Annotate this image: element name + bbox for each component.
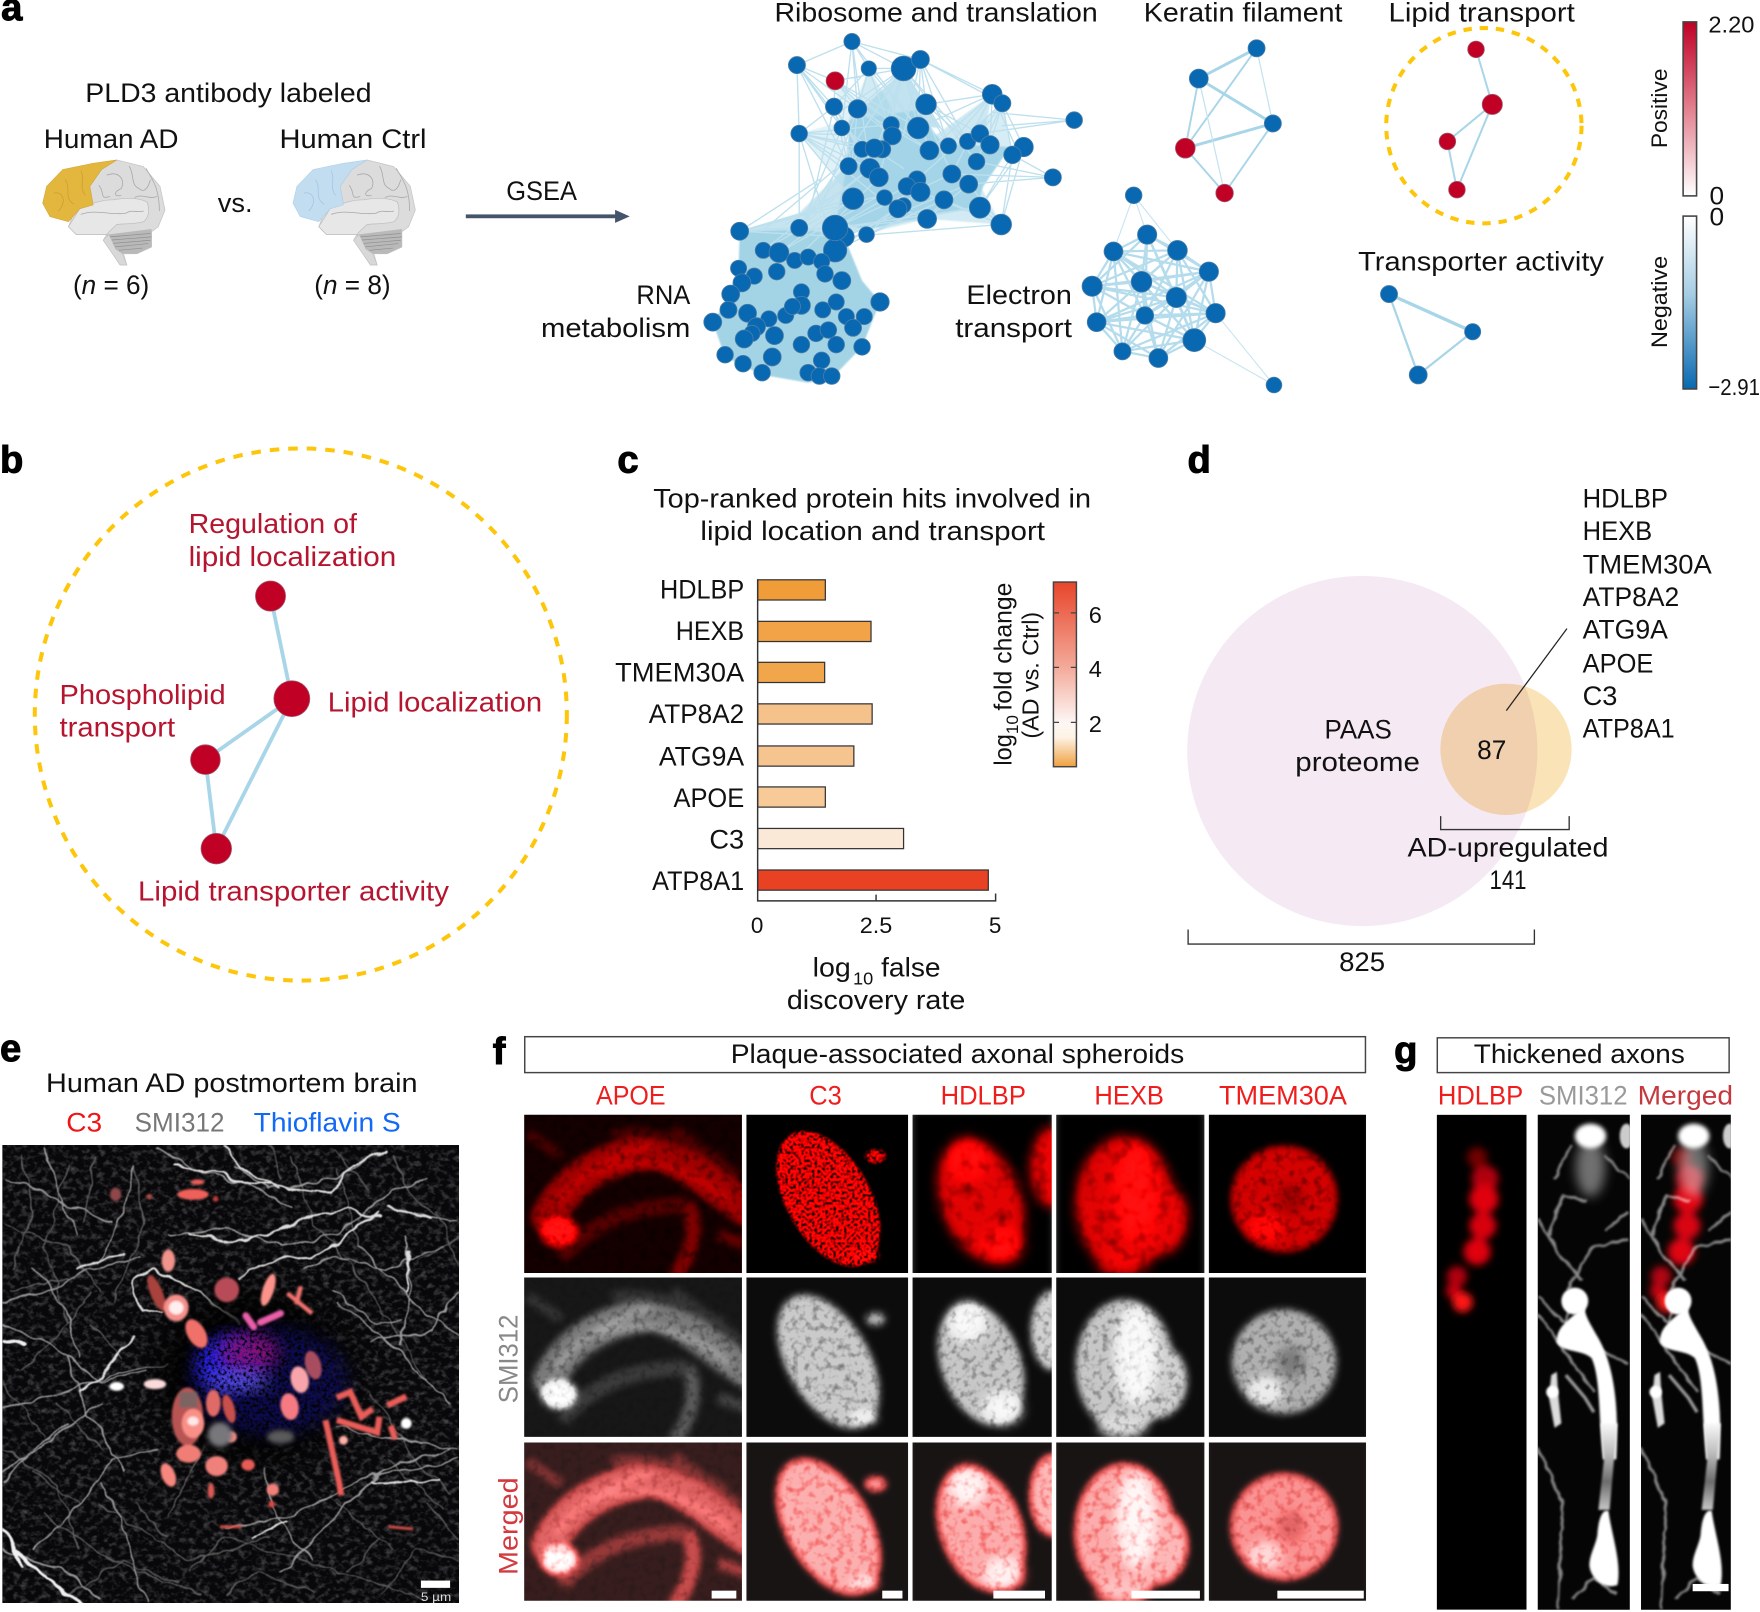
- gene list: ATP8A1: [1583, 714, 1675, 744]
- gene list: TMEM30A: [1583, 550, 1712, 580]
- category labels: C3: [709, 825, 744, 855]
- circle: PAAS proteome: [1187, 576, 1537, 926]
- label: lipid localization: Lipid localization: [328, 687, 542, 718]
- legend: positive colour bar: Positive: [1647, 68, 1672, 148]
- label: Human AD: Human AD: [44, 124, 178, 154]
- category labels: ATP8A2: [649, 699, 744, 729]
- edges: ribosome and RNA: [713, 42, 1074, 383]
- x axis title: 10: [853, 968, 873, 988]
- label: AD-upregulated 141: [1408, 833, 1608, 895]
- x axis title: log: [813, 953, 851, 983]
- plaque halo: [157, 1291, 348, 1459]
- gene list: [1583, 483, 1712, 744]
- gene list: HDLBP: [1583, 483, 1668, 513]
- column labels: panel g: Merged: [1638, 1081, 1733, 1111]
- legend: negative colour bar: [1647, 205, 1760, 400]
- micrographs: row 1 antibody channel: [516, 1106, 1372, 1285]
- legend: fold change colour bar: [990, 582, 1102, 767]
- label: n = 8: (n = 8): [314, 270, 391, 300]
- node: phospholipid transport: [191, 745, 220, 774]
- category labels: APOE: [673, 783, 744, 813]
- nodes: ribosome and translation: [788, 33, 1082, 242]
- x axis title: false: [881, 953, 941, 983]
- label: Electron transport: [955, 280, 1072, 343]
- category labels: TMEM30A: [615, 657, 744, 687]
- heading: top-ranked protein hits: lipid location and transport: [700, 516, 1046, 546]
- header box: plaque-associated axonal spheroids: [525, 1037, 1365, 1073]
- legend: negative colour bar: Negative: [1647, 256, 1672, 348]
- tick labels: 2.5: [860, 913, 892, 938]
- legend: negative colour bar: 0: [1709, 205, 1724, 232]
- gene list: ATG9A: [1583, 615, 1668, 645]
- legend: stain colours: [66, 1108, 401, 1138]
- panel label e: e: [0, 1027, 21, 1070]
- legend: positive colour bar: [1647, 12, 1754, 210]
- venn diagram: [1187, 483, 1712, 977]
- legend: stain colours: Thioflavin S: [254, 1108, 401, 1138]
- row label: SMI312: SMI312: [493, 1315, 523, 1403]
- column labels: panel g: [1438, 1081, 1733, 1111]
- axes: [758, 579, 996, 901]
- label: Electron transport: transport: [955, 313, 1072, 343]
- leader line: [1506, 629, 1567, 711]
- legend: positive colour bar: 0: [1709, 183, 1724, 210]
- legend: fold change colour bar: 4: [1089, 656, 1102, 682]
- label: lipid transporter activity: Lipid transporter activity: [138, 875, 449, 906]
- label: GSEA: GSEA: [506, 176, 577, 206]
- panel label c: c: [617, 439, 639, 482]
- node: lipid localization: [274, 681, 310, 717]
- x axis title: discovery rate: [787, 985, 965, 1015]
- tick labels: [751, 913, 1001, 938]
- scale bar: 5 µm: [421, 1591, 451, 1604]
- label: regulation of lipid localization: [189, 508, 396, 572]
- nodes: RNA metabolism: [704, 215, 889, 384]
- scale bar: panel g: [1693, 1584, 1729, 1591]
- category labels: ATG9A: [659, 742, 744, 772]
- panel label b: b: [0, 439, 23, 482]
- panel: lipid transport detail: [35, 448, 567, 981]
- legend: fold change colour bar: log: [990, 734, 1017, 766]
- gene list: HEXB: [1583, 516, 1652, 546]
- scale bar: [421, 1581, 451, 1604]
- panel label d: d: [1188, 439, 1211, 482]
- legend: fold change colour bar: 2: [1089, 711, 1102, 737]
- x axis title: [787, 953, 965, 1015]
- header box: plaque-associated axonal spheroids: Plaque-associated axonal spheroids: [731, 1039, 1184, 1069]
- column labels: panel g: HDLBP: [1438, 1081, 1523, 1111]
- heading: Transporter activity: Transporter activity: [1358, 247, 1605, 277]
- column labels: C3: [809, 1081, 842, 1111]
- node: lipid transporter activity: [201, 833, 232, 864]
- network: ribosome and RNA clusters: [704, 33, 1082, 384]
- bars: [758, 580, 988, 890]
- row label: Merged: Merged: [493, 1477, 523, 1575]
- scale bars: panel f: [712, 1591, 1364, 1599]
- network: electron transport: [1082, 187, 1282, 393]
- category labels: HEXB: [676, 616, 744, 646]
- gene list: ATP8A2: [1583, 582, 1679, 612]
- micrograph: plaque with C3, SMI312, thioflavin S: [2, 1145, 460, 1604]
- bracket: AD-upregulated: [1441, 816, 1569, 830]
- icon: Human AD brain: [43, 160, 165, 265]
- micrograph: merged channel: [1641, 1114, 1731, 1610]
- legend: fold change colour bar: 6: [1089, 602, 1102, 628]
- network: keratin filament: [1175, 40, 1281, 202]
- label: 87: 87: [1477, 735, 1506, 765]
- label: RNA metabolism: metabolism: [541, 313, 690, 343]
- header box: thickened axons: [1437, 1038, 1729, 1073]
- label: phospholipid transport: Phospholipid: [59, 679, 226, 710]
- column labels: [596, 1081, 1347, 1111]
- label: Human Ctrl: Human Ctrl: [279, 124, 427, 154]
- arrow: GSEA: [466, 210, 630, 223]
- icon: Human Ctrl brain: [293, 160, 415, 265]
- node: regulation of lipid localization: [255, 581, 286, 611]
- callout: lipid transport cluster: [1386, 28, 1582, 223]
- category labels: [615, 574, 744, 896]
- legend: positive colour bar: 2.20: [1708, 12, 1754, 38]
- label: PAAS proteome: proteome: [1295, 747, 1420, 777]
- label: Electron transport: Electron: [966, 280, 1072, 310]
- legend: fold change colour bar: fold change: [990, 583, 1017, 711]
- column labels: TMEM30A: [1219, 1081, 1347, 1111]
- amyloid plaque: [191, 1313, 348, 1435]
- micrographs: row 2 SMI312 channel: [516, 1268, 1372, 1448]
- column labels: APOE: [596, 1081, 666, 1111]
- legend: fold change colour bar: (AD vs. Ctrl): [1017, 612, 1043, 739]
- label: PAAS proteome: PAAS: [1324, 715, 1392, 745]
- tick labels: 0: [751, 913, 763, 938]
- panel label f: f: [493, 1030, 506, 1073]
- label: 825: 825: [1339, 947, 1385, 977]
- category labels: ATP8A1: [652, 866, 744, 896]
- label: RNA metabolism: RNA: [636, 280, 690, 310]
- heading: Human AD postmortem brain: Human AD postmortem brain: [46, 1068, 418, 1098]
- micrographs: row 3 merged channel: [516, 1434, 1372, 1612]
- header box: thickened axons: Thickened axons: [1474, 1039, 1685, 1069]
- circle: AD-upregulated: [1440, 684, 1572, 815]
- label: AD-upregulated 141: 141: [1489, 865, 1527, 895]
- panel label g: g: [1394, 1029, 1417, 1072]
- label: regulation of lipid localization: lipid localization: [189, 541, 396, 572]
- label: AD-upregulated 141: AD-upregulated: [1408, 833, 1608, 863]
- column labels: HEXB: [1094, 1081, 1164, 1111]
- C3 spheroids: [110, 1179, 413, 1529]
- label: phospholipid transport: transport: [59, 711, 175, 742]
- legend: stain colours: C3: [66, 1108, 102, 1138]
- heading: top-ranked protein hits: Top-ranked protein hits involved in: [653, 483, 1091, 513]
- legend: fold change colour bar: 10: [1003, 715, 1022, 734]
- label: RNA metabolism: [541, 280, 690, 343]
- gene list: C3: [1583, 681, 1617, 711]
- heading: PLD3 antibody labeled: PLD3 antibody labeled: [85, 78, 372, 108]
- tick labels: 5: [989, 913, 1001, 938]
- micrograph: HDLBP channel: [1436, 1114, 1526, 1610]
- bright white deposits: [109, 1379, 412, 1447]
- label: n = 6: (n = 6): [73, 270, 149, 300]
- column labels: HDLBP: [941, 1081, 1026, 1111]
- bracket: PAAS: [1188, 929, 1534, 944]
- gene list: APOE: [1583, 648, 1653, 678]
- micrograph: SMI312 channel: [1538, 1114, 1630, 1610]
- heading: top-ranked protein hits: [653, 483, 1091, 546]
- label: vs.: vs.: [218, 188, 253, 218]
- column labels: panel g: SMI312: [1539, 1081, 1628, 1111]
- category labels: HDLBP: [660, 574, 744, 604]
- legend: stain colours: SMI312: [135, 1108, 224, 1138]
- label: regulation of lipid localization: Regulation of: [189, 508, 357, 539]
- label: PAAS proteome: [1295, 715, 1420, 777]
- network: transporter activity: [1380, 286, 1481, 384]
- axon fibres: [2, 1145, 459, 1612]
- label: phospholipid transport: [59, 679, 226, 742]
- bar chart: protein hits: [615, 574, 1001, 1015]
